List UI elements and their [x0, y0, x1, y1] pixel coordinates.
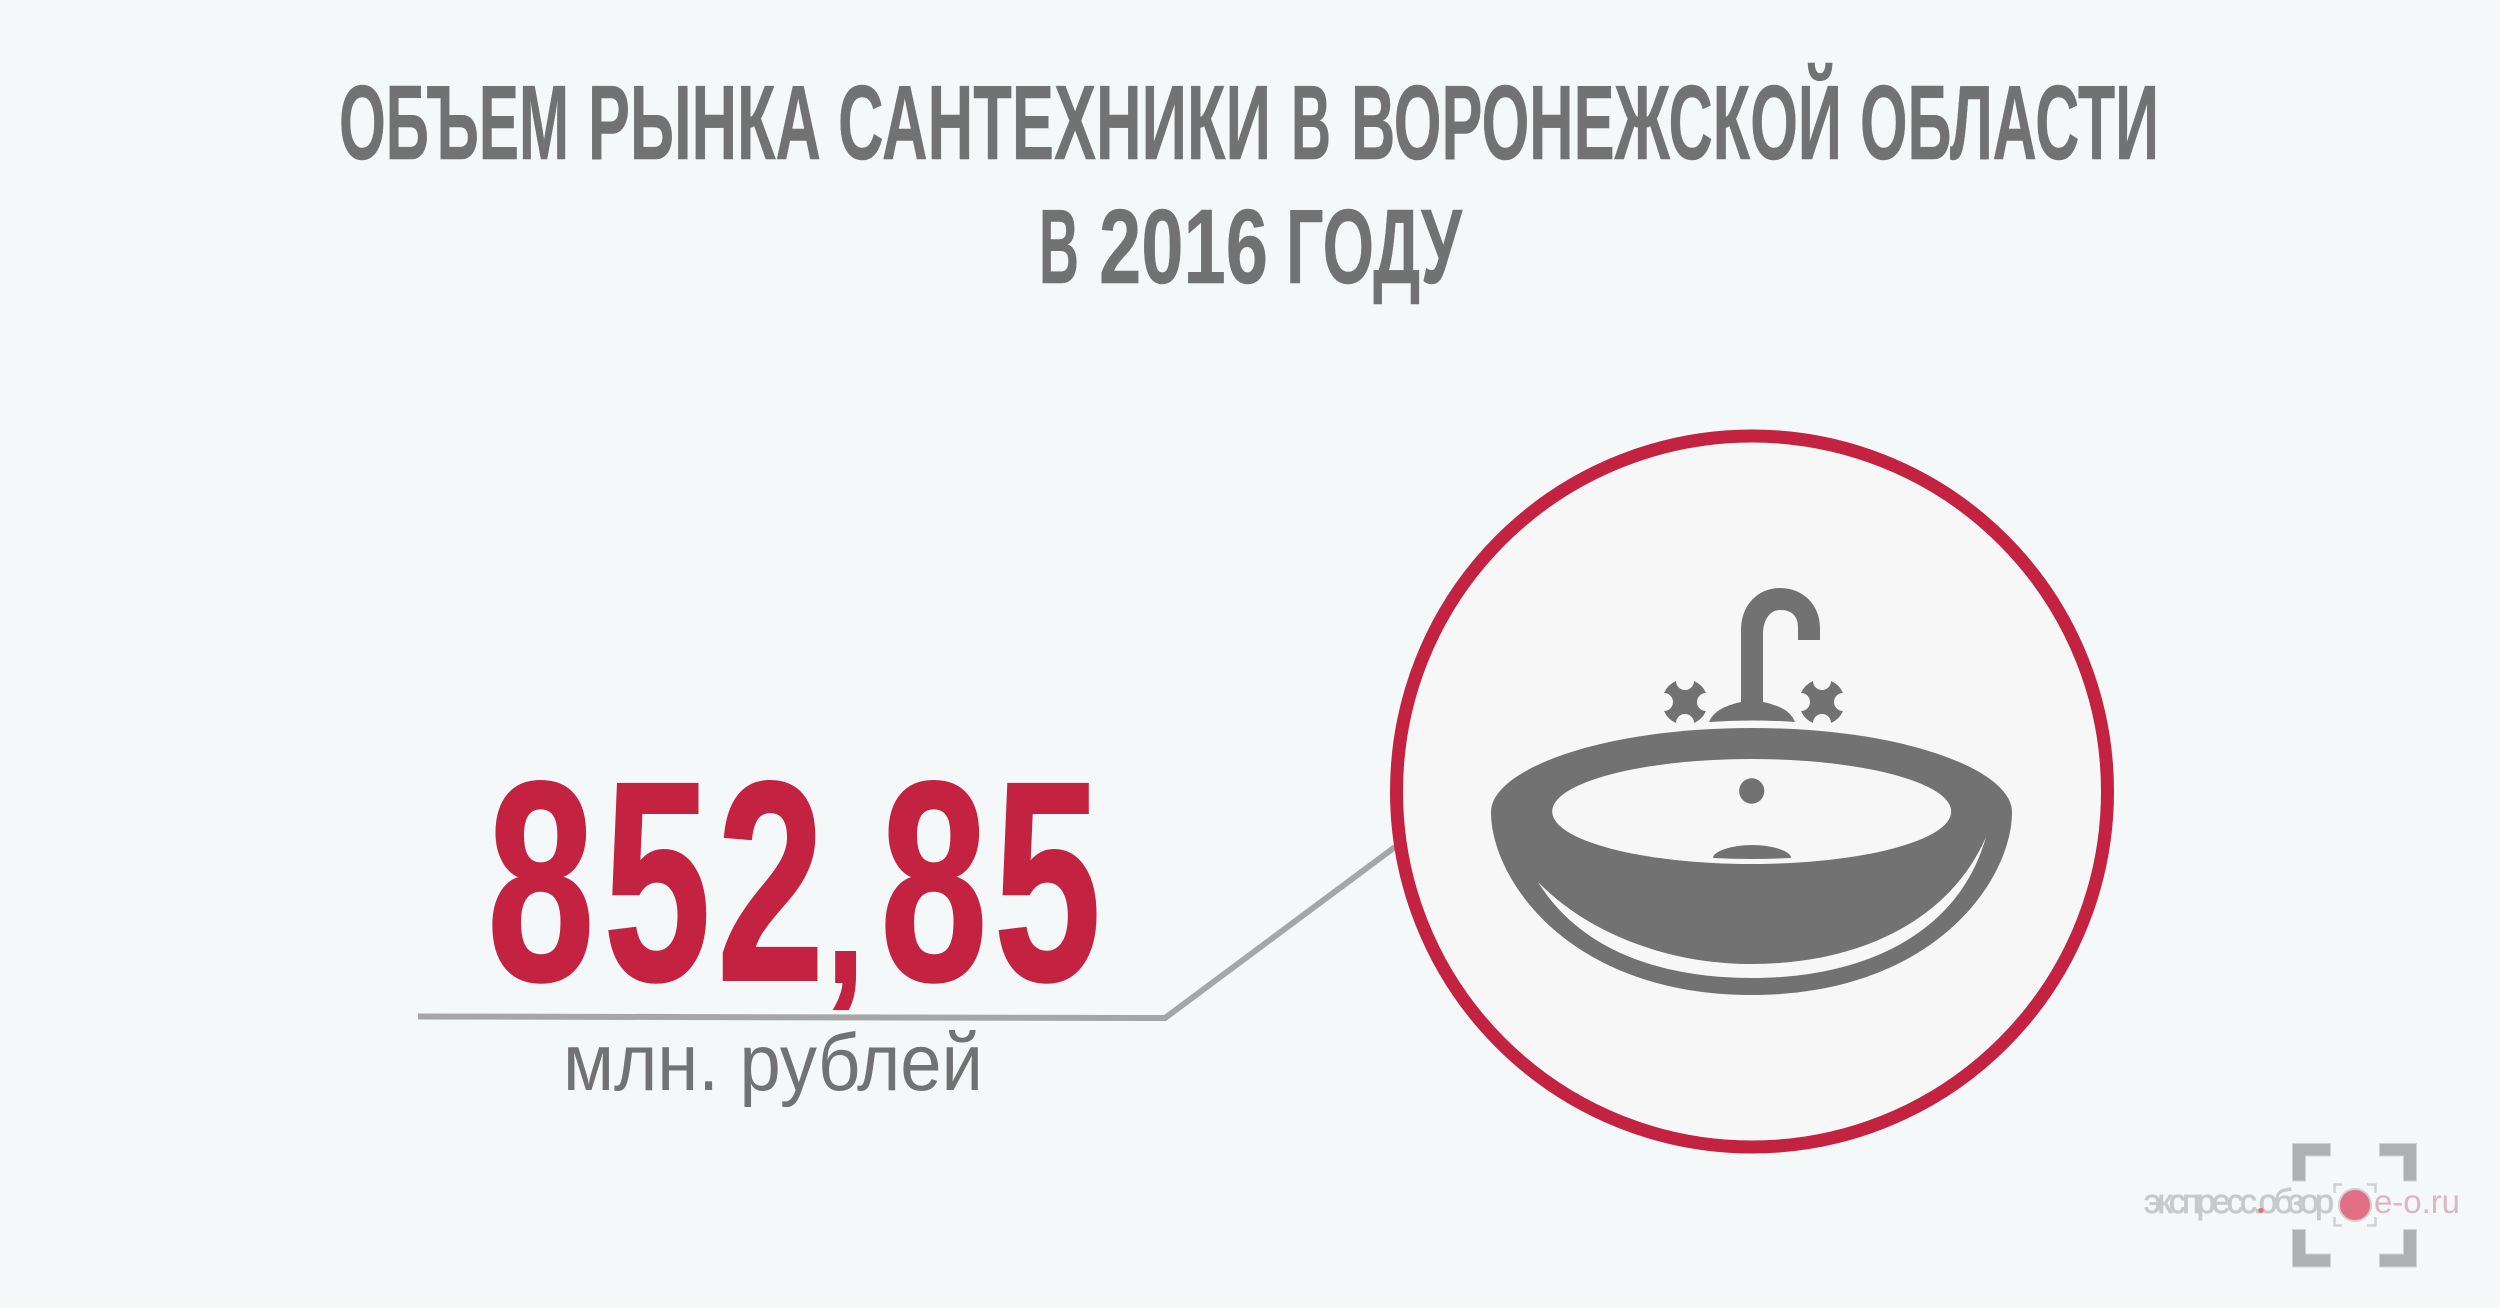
logo domain: e-o.ru — [2374, 1183, 2460, 1220]
title: РЫНКА — [588, 64, 821, 182]
title: В — [1039, 188, 1079, 306]
logo text: экспресс.обзор — [2144, 1183, 2334, 1221]
title: ГОДУ — [1286, 188, 1463, 306]
connector line — [418, 847, 1395, 1018]
logo dot — [2258, 1208, 2264, 1213]
title: 2016 — [1099, 188, 1268, 306]
title: САНТЕХНИКИ — [838, 64, 1271, 182]
big number: 85 — [880, 722, 1101, 1041]
logo circle — [2339, 1189, 2371, 1221]
small frame corners — [2334, 1184, 2376, 1226]
right handle — [1801, 681, 1843, 723]
big number: 852 — [487, 722, 824, 1041]
title: ВОРОНЕЖСКОЙ — [1351, 63, 1842, 182]
camera frame corners — [2292, 1144, 2416, 1267]
icon: sink — [1491, 588, 2012, 995]
sink bowl — [1491, 728, 2012, 995]
circle — [1396, 436, 2108, 1147]
basin opening — [1552, 759, 1951, 864]
drain hole — [1739, 778, 1764, 804]
overflow — [1713, 845, 1791, 859]
bowl highlight — [1538, 837, 1986, 978]
title — [339, 63, 2159, 306]
big number: , — [829, 822, 862, 1017]
left handle — [1664, 681, 1706, 723]
logo watermark — [2144, 1144, 2460, 1267]
faucet — [1709, 588, 1820, 722]
circle with sink icon — [1396, 436, 2108, 1147]
title: ОБЪЕМ — [339, 64, 569, 182]
title: В — [1291, 64, 1331, 182]
unit label: млн. рублей — [563, 1018, 983, 1108]
title: ОБЛАСТИ — [1860, 64, 2159, 182]
